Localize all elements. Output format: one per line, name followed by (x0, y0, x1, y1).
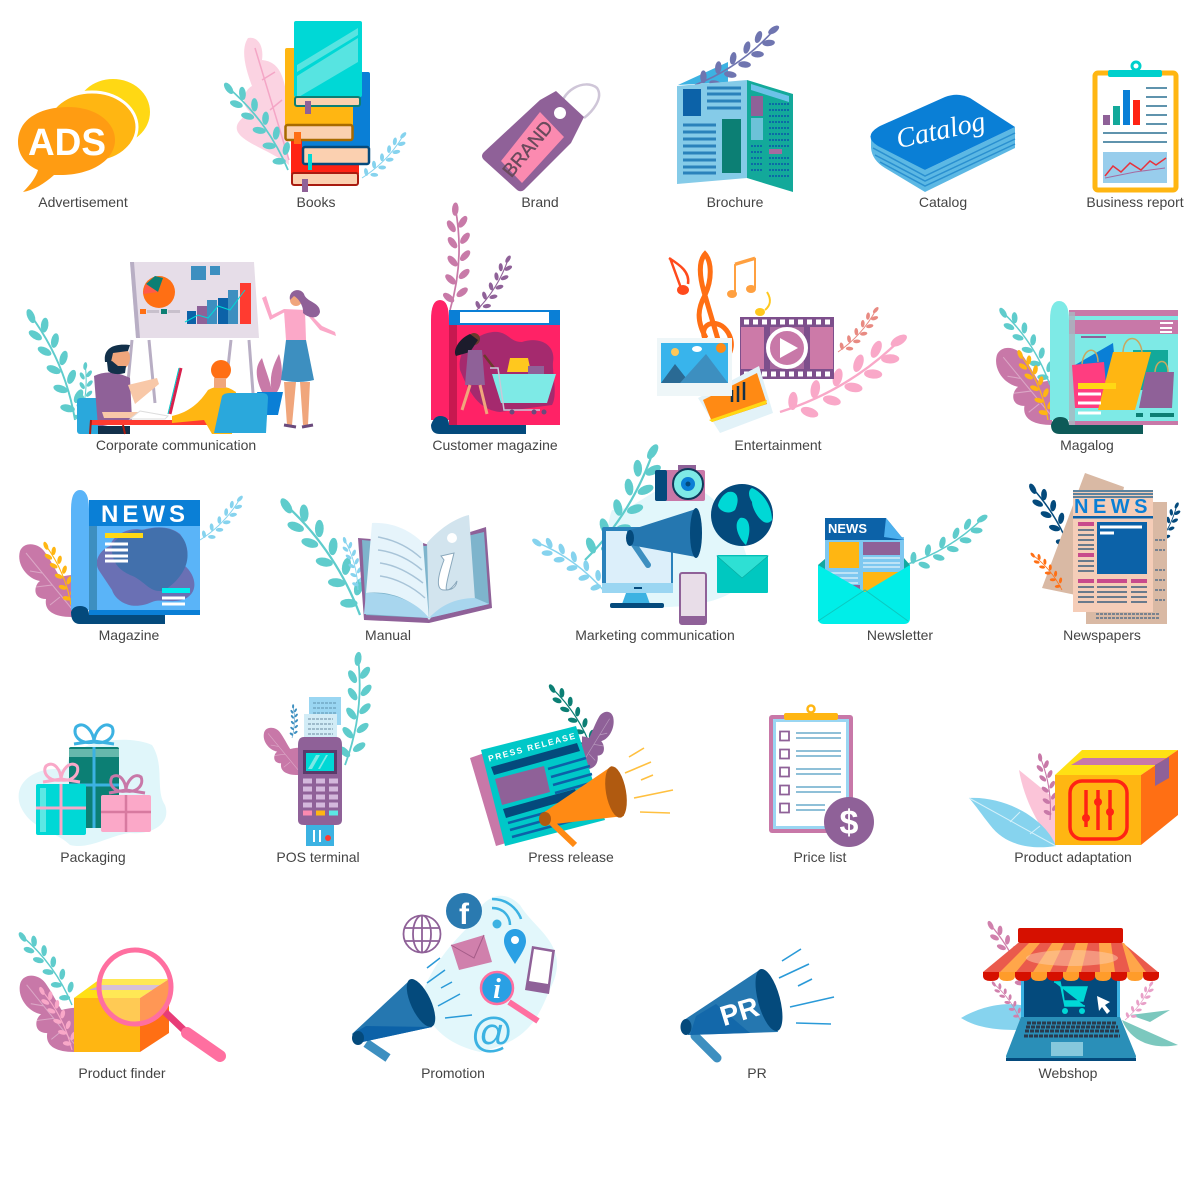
megaphone (352, 975, 441, 1058)
cyan gift (36, 764, 86, 835)
tag text: BRAND (499, 117, 558, 182)
label: Customer magazine: Customer magazine (432, 437, 558, 453)
at sign: @ (471, 1009, 513, 1056)
awning (983, 928, 1159, 981)
icon: POS terminal (264, 651, 379, 846)
icon: Promotion (352, 893, 557, 1058)
magnifier (99, 950, 220, 1056)
film strip (740, 317, 834, 379)
icon: Business report (1095, 62, 1176, 190)
wifi (492, 899, 521, 928)
shopper (455, 333, 494, 414)
icon: Price list: $ (840, 804, 859, 842)
camera (655, 465, 705, 501)
icon: Packaging (19, 725, 166, 846)
globe (711, 484, 773, 546)
phone (525, 946, 555, 994)
icon: Magalog (993, 299, 1178, 434)
icon: Newsletter (818, 508, 996, 624)
label: Webshop: Webshop (1039, 1065, 1098, 1081)
sound dashes (427, 958, 472, 1018)
music notes (669, 258, 770, 316)
label: Newspapers: Newspapers (1063, 627, 1141, 643)
NEWS masthead: NEWS (101, 501, 189, 528)
icon: Price list (769, 706, 874, 847)
label: Press release: Press release (528, 849, 614, 865)
globe (404, 915, 440, 953)
icon: Entertainment (657, 254, 920, 435)
NEWS header: NEWS (828, 521, 867, 536)
cart icon (1054, 982, 1087, 1014)
label: Catalog: Catalog (919, 194, 967, 210)
label: Brand: Brand (521, 194, 559, 210)
info magnifier: i (493, 974, 501, 1005)
icon: Brochure (677, 19, 793, 192)
icon: Newspapers (1023, 473, 1187, 624)
shopping cart (490, 358, 556, 414)
polaroid desert (698, 366, 773, 433)
shopping bags (1072, 338, 1174, 415)
laptop (1006, 975, 1136, 1061)
icon: Manual (271, 485, 492, 623)
seated woman (172, 360, 268, 434)
label: Magazine: Magazine (99, 627, 160, 643)
PR text: PR (716, 991, 763, 1032)
label: POS terminal: POS terminal (276, 849, 360, 865)
ADS text: ADS (28, 122, 106, 164)
icon: Marketing communication (528, 438, 773, 624)
NEWS masthead: NEWS (1074, 496, 1152, 518)
phone (680, 573, 706, 624)
label: Advertisement: Advertisement (38, 194, 128, 210)
megaphone (626, 508, 702, 565)
sliders icon (1070, 781, 1127, 839)
dollar badge (824, 797, 874, 847)
label: Product finder: Product finder (78, 1065, 166, 1081)
label: Corporate communication: Corporate communication (96, 437, 256, 453)
presentation board (130, 262, 259, 338)
photo mountains (657, 338, 732, 396)
label: Promotion: Promotion (421, 1065, 485, 1081)
plant (257, 354, 282, 392)
icon: Product finder (13, 923, 220, 1056)
terminal body (298, 737, 342, 825)
map pin (504, 929, 526, 964)
label: Marketing communication: Marketing communication (575, 627, 735, 643)
cursor arrow (1097, 996, 1110, 1014)
press release heading: PRESS RELEASE (487, 730, 577, 764)
icon: Books (217, 21, 414, 192)
icon: PR megaphone (680, 949, 834, 1058)
monitor (602, 527, 673, 608)
man (77, 345, 159, 434)
pink gift (101, 776, 151, 832)
icon: Advertisement (18, 79, 150, 192)
info i (438, 533, 457, 590)
label: Magalog: Magalog (1060, 437, 1114, 453)
Facebook badge (446, 893, 482, 931)
table and monitor (91, 420, 211, 425)
label: Books: Books (297, 194, 335, 210)
info magnifier (481, 972, 538, 1021)
icon: Catalog book (870, 95, 1015, 192)
label: Newsletter: Newsletter (867, 627, 933, 643)
presenting woman (262, 290, 336, 427)
icon: Webshop (961, 914, 1178, 1061)
label: Product adaptation: Product adaptation (1014, 849, 1132, 865)
label: Brochure: Brochure (707, 194, 764, 210)
label: Manual: Manual (365, 627, 411, 643)
icon: Brand tag (482, 84, 599, 191)
megaphone (539, 765, 630, 845)
envelope (451, 935, 492, 970)
receipts (304, 697, 341, 742)
icon: Press release (470, 677, 673, 846)
envelope (717, 555, 768, 593)
treble clef (699, 254, 731, 374)
catalog title: Catalog (893, 106, 988, 155)
teal gift (69, 725, 119, 828)
icon: Corporate communication (18, 262, 336, 434)
sound rays (625, 748, 673, 813)
icon: Product adaptation (969, 750, 1178, 847)
label: Packaging: Packaging (60, 849, 126, 865)
label: Price list: Price list (794, 849, 847, 865)
icon: Magazine (19, 490, 250, 624)
label: Business report: Business report (1086, 194, 1184, 210)
Facebook badge: f (459, 898, 470, 931)
icon: Customer magazine (431, 202, 560, 434)
label: PR: PR (747, 1065, 767, 1081)
sound rays (779, 949, 834, 1024)
label: Entertainment: Entertainment (734, 437, 822, 453)
